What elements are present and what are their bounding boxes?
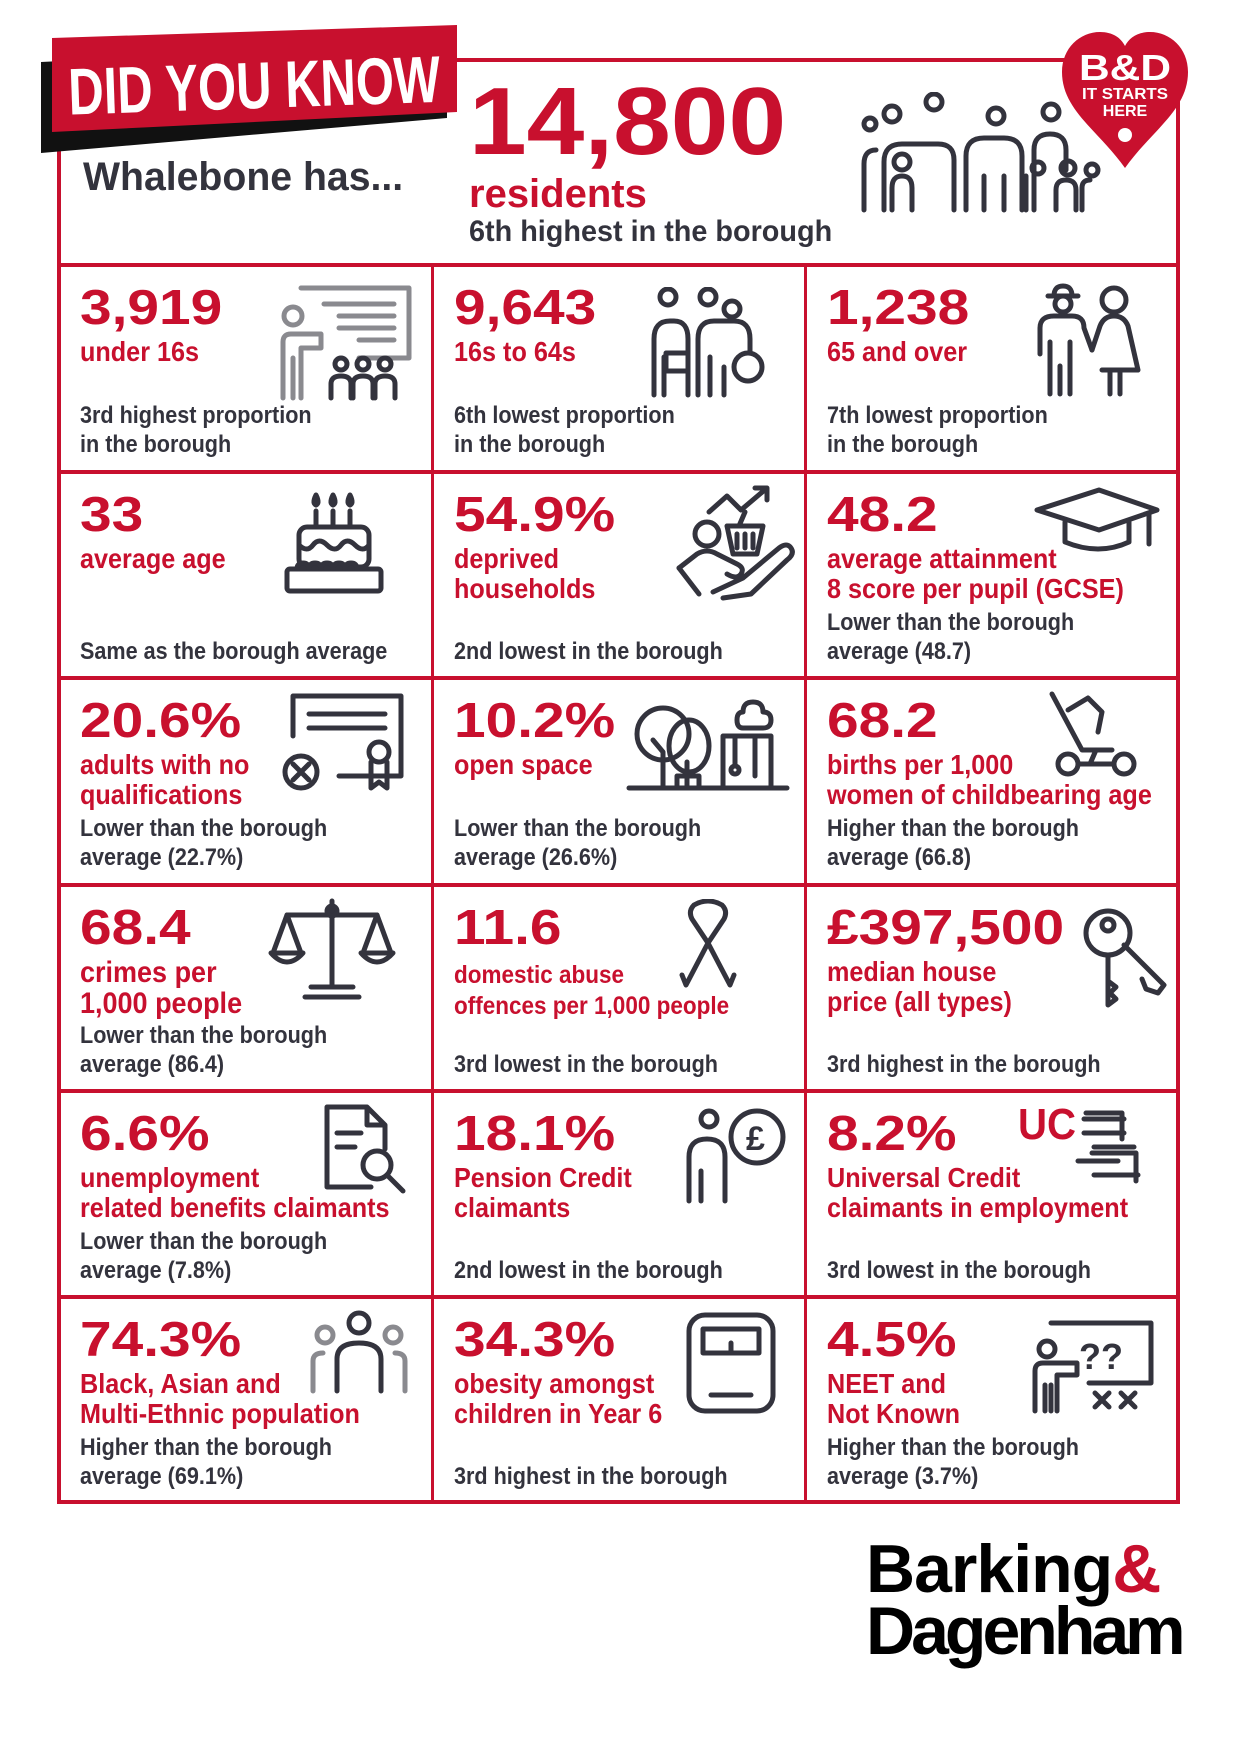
panel: 16s to 64s: 6th lowest proportion (454, 402, 675, 429)
panel: pension credit (454, 1107, 786, 1284)
icon: weighing scale (686, 1312, 776, 1414)
headline stat: residents: residents (469, 172, 647, 216)
panel: pension credit: 18.1% (454, 1107, 615, 1161)
panel: deprived households: 2nd lowest in the borough (454, 638, 723, 665)
panel: ethnicity (80, 1310, 408, 1490)
panel: unemployment: related benefits claimants (80, 1192, 390, 1223)
panel: average age (80, 488, 387, 665)
panel: 65 and over (827, 281, 1140, 458)
panel: attainment 8: Lower than the borough (827, 609, 1074, 636)
logo: Barking & Dagenham (866, 1538, 1196, 1678)
panel: births: women of childbearing age (827, 779, 1152, 810)
headline stat: residents (469, 68, 832, 248)
panel: births: births per 1,000 (827, 749, 1013, 780)
panel: 16s to 64s (454, 281, 764, 458)
icon: teacher with question marks: ?? (1079, 1336, 1123, 1377)
panel: births: Higher than the borough (827, 815, 1079, 842)
panel: ethnicity: Higher than the borough (80, 1434, 332, 1461)
panel: NEET: Not Known (827, 1398, 960, 1429)
panel: house price (827, 901, 1167, 1078)
panel: deprived households: households (454, 573, 595, 604)
icon: awareness ribbon (680, 899, 736, 988)
panel: obesity: obesity amongst (454, 1368, 654, 1399)
panel: deprived households: deprived (454, 543, 559, 574)
icon: UC coins (1018, 1100, 1140, 1184)
panel: pension credit: Pension Credit (454, 1162, 632, 1193)
logo: B&D heart: HERE (1103, 103, 1148, 120)
panel: unemployment: Lower than the borough (80, 1228, 327, 1255)
icon: scales of justice (268, 898, 396, 1000)
panel: under 16s: 3,919 (80, 281, 222, 335)
panel: ethnicity: average (69.1%) (80, 1463, 243, 1490)
icon: pushchair (1050, 692, 1136, 776)
panel: universal credit: 3rd lowest in the borough (827, 1257, 1091, 1284)
panel: under 16s: 3rd highest proportion (80, 402, 312, 429)
panel: attainment 8: average (48.7) (827, 638, 971, 665)
panel: open space: average (26.6%) (454, 844, 617, 871)
panel: obesity (454, 1312, 776, 1490)
panel: universal credit: 8.2% (827, 1107, 957, 1161)
panel: under 16s (80, 281, 412, 458)
icon: keys (1084, 908, 1167, 1008)
icon: birthday cake (284, 492, 384, 594)
panel: no qualifications: qualifications (80, 779, 242, 810)
logo: B&D heart: B&D (1079, 47, 1171, 88)
panel: obesity: 34.3% (454, 1313, 615, 1367)
panel: open space (454, 694, 790, 871)
panel: no qualifications: 20.6% (80, 694, 241, 748)
panel: universal credit: Universal Credit (827, 1162, 1020, 1193)
panel: crimes: average (86.4) (80, 1051, 224, 1078)
panel: house price: 3rd highest in the borough (827, 1051, 1101, 1078)
icon: working adults (652, 287, 764, 398)
panel: 16s to 64s: 9,643 (454, 281, 596, 335)
panel: 16s to 64s: 16s to 64s (454, 336, 576, 367)
panel: 16s to 64s: in the borough (454, 431, 605, 458)
panel: NEET: NEET and (827, 1368, 946, 1399)
panel: ethnicity: 74.3% (80, 1313, 241, 1367)
panel: average age: Same as the borough average (80, 638, 387, 665)
panel: 65 and over: 65 and over (827, 336, 967, 367)
panel: unemployment: 6.6% (80, 1107, 210, 1161)
logo: Barking & Dagenham: Dagenham (866, 1593, 1182, 1669)
panel: domestic abuse: offences per 1,000 people (454, 992, 729, 1020)
panel: no qualifications: Lower than the borough (80, 815, 327, 842)
panel: under 16s: under 16s (80, 336, 199, 367)
panel: births (826, 692, 1152, 871)
panel: crimes: Lower than the borough (80, 1022, 327, 1049)
icon: park (626, 700, 790, 790)
panel: house price: median house (827, 956, 996, 987)
panel: ethnicity: Multi-Ethnic population (80, 1398, 360, 1429)
title banner: DID YOU KNOW (41, 25, 457, 153)
panel: domestic abuse: domestic abuse (454, 961, 624, 989)
panel: NEET: 4.5% (827, 1313, 957, 1367)
panel: pension credit: 2nd lowest in the borough (454, 1257, 723, 1284)
panel: attainment 8: average attainment (827, 543, 1057, 574)
panel: universal credit: claimants in employment (827, 1192, 1128, 1223)
panel: under 16s: in the borough (80, 431, 231, 458)
panel: 65 and over: 7th lowest proportion (827, 402, 1048, 429)
headline stat: residents: 14,800 (469, 68, 786, 175)
panel: attainment 8: 48.2 (827, 488, 938, 542)
panel: attainment 8: 8 score per pupil (GCSE) (827, 573, 1124, 604)
logo: Barking & Dagenham: Barking& (866, 1531, 1160, 1607)
panel: crimes: crimes per (80, 956, 217, 989)
panel: 65 and over: 1,238 (827, 281, 969, 335)
icon: UC coins: UC (1018, 1100, 1076, 1149)
panel: universal credit (827, 1100, 1140, 1284)
icon: elderly with pound: £ (746, 1120, 765, 1158)
icon: graduation cap (1034, 488, 1160, 552)
panel: domestic abuse: 3rd lowest in the borough (454, 1051, 718, 1078)
panel: crimes: 68.4 (80, 901, 191, 955)
panel: open space: 10.2% (454, 694, 615, 748)
panel: attainment 8 (827, 488, 1160, 665)
panel: unemployment (80, 1104, 406, 1284)
icon: three people (310, 1310, 408, 1394)
panel: ethnicity: Black, Asian and (80, 1368, 281, 1399)
icon: elderly couple (1038, 284, 1140, 396)
panel: no qualifications (80, 694, 404, 871)
panel: births: average (66.8) (827, 844, 971, 871)
panel: pension credit: claimants (454, 1192, 570, 1223)
icon: document with magnifier (324, 1104, 406, 1194)
icon: elderly with pound (686, 1108, 786, 1204)
panel: deprived households (454, 486, 795, 665)
panel: NEET: average (3.7%) (827, 1463, 978, 1490)
panel: house price: price (all types) (827, 986, 1012, 1017)
panel: average age: 33 (80, 488, 143, 542)
panel: domestic abuse (454, 899, 736, 1078)
panel: unemployment: average (7.8%) (80, 1257, 231, 1284)
panel: crimes: 1,000 people (80, 987, 242, 1020)
headline stat: residents: 6th highest in the borough (469, 215, 832, 248)
panel: house price: £397,500 (827, 901, 1064, 955)
logo: B&D heart (1062, 32, 1188, 168)
icon: hand with money (676, 486, 795, 600)
logo: B&D heart: IT STARTS (1082, 86, 1168, 103)
panel: obesity: children in Year 6 (454, 1398, 662, 1429)
panel: obesity: 3rd highest in the borough (454, 1463, 728, 1490)
panel: open space: open space (454, 749, 593, 780)
icon: teacher with question marks (1032, 1320, 1154, 1414)
panel: average age: average age (80, 543, 226, 574)
subtitle: Whalebone has...: Whalebone has... (83, 155, 403, 199)
panel: 65 and over: in the borough (827, 431, 978, 458)
panel: no qualifications: adults with no (80, 749, 249, 780)
panel: unemployment: unemployment (80, 1162, 259, 1193)
panel: domestic abuse: 11.6 (454, 901, 561, 955)
panel: deprived households: 54.9% (454, 488, 615, 542)
icon: certificate (282, 694, 404, 790)
icon: group of people (862, 92, 1100, 212)
panel: NEET (827, 1313, 1154, 1490)
panel: NEET: Higher than the borough (827, 1434, 1079, 1461)
icon: teacher with class (280, 286, 412, 400)
panel: no qualifications: average (22.7%) (80, 844, 243, 871)
panel: open space: Lower than the borough (454, 815, 701, 842)
panel: births: 68.2 (827, 694, 938, 748)
panel: crimes (80, 898, 396, 1078)
